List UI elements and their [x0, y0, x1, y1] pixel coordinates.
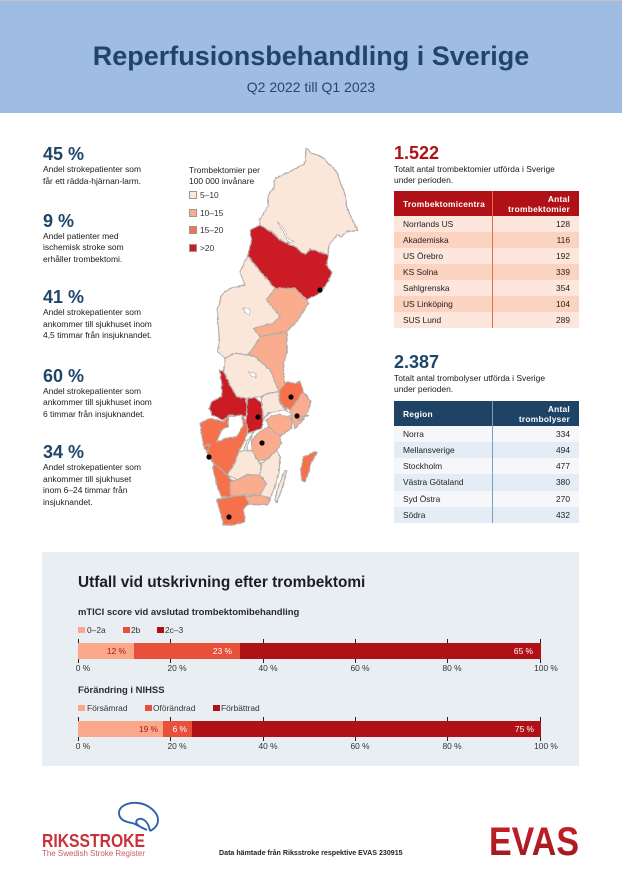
table: thrombectomy centres: 339: [556, 267, 570, 277]
table: thrombolysis regions: Mellansverige: [403, 445, 455, 455]
stat: 2.387 thrombolyses: Totalt antal trombolyser utförda i Sverige: [394, 373, 545, 383]
axis labels: 40 %: [258, 663, 278, 673]
table: thrombolysis regions: 432: [556, 510, 570, 520]
table: thrombolysis regions: [394, 401, 579, 523]
ticks: [78, 639, 541, 663]
stat: 41 %: [43, 287, 152, 340]
logo: Riksstroke: [42, 802, 159, 858]
table: thrombolysis regions: Norra: [403, 429, 424, 439]
legend item: 15–20: [189, 225, 223, 235]
table header: trombolyser: [519, 414, 570, 424]
stat: 9 %: 9 %: [43, 210, 74, 230]
header band: [0, 0, 622, 113]
chart: mTICI score: [76, 607, 558, 673]
source note: Data hämtade från Riksstroke respektive EVAS 230915: [219, 849, 403, 857]
stacked bar: 65 %: [514, 646, 533, 656]
chart heading: mTICI score vid avslutad trombektomibehandling: [78, 607, 299, 618]
chart heading: Förändring i NIHSS: [78, 685, 165, 696]
stat: 41 %: ankommer till sjukhuset inom: [43, 319, 152, 329]
table: thrombolysis regions: Stockholm: [403, 461, 442, 471]
stat: 60 %: 6 timmar från insjuknandet.: [43, 409, 145, 419]
stat: 45 %: får ett rädda-hjärnan-larm.: [43, 176, 141, 186]
panel heading: Utfall vid utskrivning efter trombektomi: [78, 574, 365, 591]
stat: 1.522 thrombectomies: Totalt antal trombektomier utförda i Sverige: [394, 164, 555, 174]
table: thrombolysis regions: 380: [556, 477, 570, 487]
stat: 34 %: Andel strokepatienter som: [43, 462, 141, 472]
legend: Oförändrad: [153, 703, 195, 713]
table header: trombektomier: [508, 204, 570, 214]
axis labels: 60 %: [350, 663, 370, 673]
legend item: 10–15: 10–15: [200, 208, 223, 218]
legend: 2b: [131, 625, 140, 635]
table: thrombectomy centres: 354: [556, 283, 570, 293]
stat: 45 %: 45 %: [43, 144, 84, 164]
stacked bar: 23 %: [213, 646, 232, 656]
legend item: >20: [189, 243, 214, 253]
table: thrombolysis regions: Södra: [403, 510, 425, 520]
stat: 34 %: ankommer till sjukhuset: [43, 474, 131, 484]
axis labels: 20 %: [167, 741, 187, 751]
chart: NIHSS change: [76, 685, 558, 751]
table: thrombolysis regions: 494: [556, 445, 570, 455]
stat: 2.387 thrombolyses: 2.387: [394, 352, 439, 372]
stat: 9 %: Andel patienter med: [43, 230, 119, 240]
stacked bar: 12 %: [107, 646, 126, 656]
stat: 41 %: 41 %: [43, 287, 84, 307]
stacked bar: 75 %: [515, 724, 534, 734]
wordmark: RIKSSTROKE: [42, 831, 145, 851]
axis labels: 0 %: [76, 741, 90, 751]
ticks: [78, 717, 541, 741]
legend: 2c–3: [165, 625, 183, 635]
icon: brain outline: [119, 803, 158, 831]
table: thrombectomy centres: SUS Lund: [403, 315, 441, 325]
legend: Försämrad: [87, 703, 128, 713]
axis labels: 80 %: [442, 741, 462, 751]
table: thrombolysis regions: Syd Östra: [403, 494, 440, 504]
table: thrombectomy centres: 104: [556, 299, 570, 309]
axis labels: 40 %: [258, 741, 278, 751]
table: thrombolysis regions: 270: [556, 494, 570, 504]
stat: 41 %: 4,5 timmar från insjuknandet.: [43, 330, 152, 340]
table header: Region: [403, 409, 433, 419]
legend: [78, 625, 183, 635]
legend title: [189, 165, 260, 186]
stat: 2.387 thrombolyses: [394, 352, 545, 394]
table: thrombolysis regions: Västra Götaland: [403, 477, 464, 487]
legend: [78, 703, 260, 713]
stat: 9 %: [43, 210, 124, 264]
stat: 60 %: ankommer till sjukhuset inom: [43, 397, 152, 407]
table: thrombectomy centres: [394, 191, 579, 328]
table: thrombectomy centres: Norrlands US: [403, 219, 453, 229]
legend item: 15–20: 15–20: [200, 225, 223, 235]
stat: 2.387 thrombolyses: under perioden.: [394, 384, 453, 394]
legend item: 5–10: 5–10: [200, 190, 219, 200]
axis labels: 80 %: [442, 663, 462, 673]
tagline: The Swedish Stroke Register: [42, 848, 145, 858]
map legend: [189, 165, 260, 253]
stat: 41 %: Andel strokepatienter som: [43, 307, 141, 317]
stat: 34 %: 34 %: [43, 442, 84, 462]
legend: Förbättrad: [221, 703, 260, 713]
table: thrombectomy centres: 192: [556, 251, 570, 261]
stat: 60 %: 60 %: [43, 366, 84, 386]
stat: 1.522 thrombectomies: 1.522: [394, 143, 439, 163]
panel: discharge outcomes: [42, 552, 579, 766]
table: thrombectomy centres: 289: [556, 315, 570, 325]
table: thrombectomy centres: US Linköping: [403, 299, 453, 309]
axis labels: 100 %: [534, 741, 558, 751]
legend item: 5–10: [189, 190, 219, 200]
title: Reperfusionsbehandling i Sverige: [93, 41, 529, 71]
stat: 9 %: erhåller trombektomi.: [43, 254, 122, 264]
stat: 9 %: ischemisk stroke som: [43, 242, 124, 252]
axis labels: [76, 741, 558, 751]
stat: 45 %: [43, 144, 141, 186]
table: thrombectomy centres: KS Solna: [403, 267, 438, 277]
legend: 0–2a: [87, 625, 106, 635]
legend title: Trombektomier per: [189, 165, 260, 175]
table: thrombectomy centres: US Örebro: [403, 251, 443, 261]
table: thrombectomy centres: Sahlgrenska: [403, 283, 450, 293]
table header: Antal: [548, 194, 570, 204]
stacked bar: [78, 643, 541, 659]
legend item: >20: >20: [200, 243, 214, 253]
legend title: 100 000 invånare: [189, 176, 254, 186]
axis labels: 0 %: [76, 663, 90, 673]
stacked bar: [78, 721, 541, 737]
table: thrombolysis regions: 334: [556, 429, 570, 439]
stat: 1.522 thrombectomies: [394, 143, 555, 184]
axis labels: 100 %: [534, 663, 558, 673]
subtitle: Q2 2022 till Q1 2023: [247, 79, 375, 95]
axis labels: 20 %: [167, 663, 187, 673]
stat: 34 %: [43, 442, 141, 507]
stat: 34 %: inom 6–24 timmar från: [43, 485, 127, 495]
table header: Trombektomicentra: [403, 199, 485, 209]
stat: 60 %: Andel strokepatienter som: [43, 386, 141, 396]
stacked bar: 19 %: [139, 724, 158, 734]
axis labels: [76, 663, 558, 673]
stacked bar: 6 %: [173, 724, 187, 734]
table: thrombectomy centres: 128: [556, 219, 570, 229]
table header: [394, 401, 579, 426]
stat: 1.522 thrombectomies: under perioden.: [394, 174, 453, 184]
table: thrombolysis regions: 477: [556, 461, 570, 471]
table header: Antal: [548, 404, 570, 414]
stat: 60 %: [43, 366, 152, 419]
table header: [394, 191, 579, 216]
axis labels: 60 %: [350, 741, 370, 751]
stat: 34 %: insjuknandet.: [43, 497, 93, 507]
legend item: 10–15: [189, 208, 223, 218]
table: thrombectomy centres: Akademiska: [403, 235, 449, 245]
stat: 45 %: Andel strokepatienter som: [43, 164, 141, 174]
table: thrombectomy centres: 116: [557, 235, 570, 245]
